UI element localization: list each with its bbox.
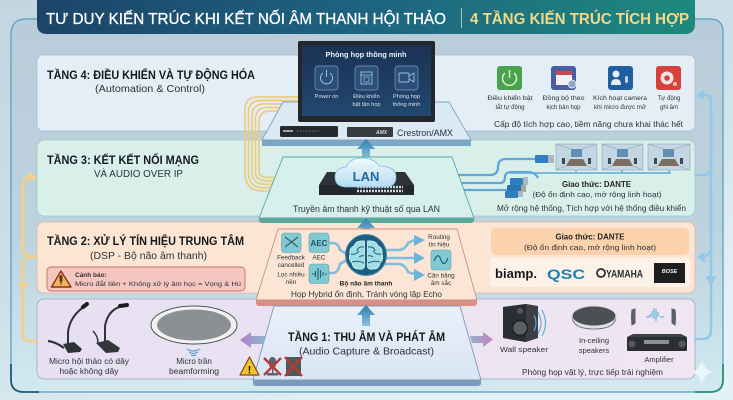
- icon: crossed speaker: [285, 357, 302, 376]
- room 1: [556, 144, 597, 170]
- tier 2 heading: (DSP - Bộ não âm thanh): [90, 250, 207, 262]
- icon: LAN cloud: LAN: [353, 169, 379, 184]
- control hardware: [280, 126, 453, 138]
- yellow control cables: [245, 97, 320, 191]
- icon: camera trigger: [608, 66, 633, 90]
- icon labels: khi micro được mở: [594, 104, 646, 111]
- panel: tier 3 background: [37, 140, 695, 216]
- Crestron/AMX label: Crestron/AMX: [397, 128, 453, 138]
- labels: Feedback: [277, 254, 306, 262]
- labels: tín hiệu: [429, 242, 450, 248]
- title divider: [461, 8, 462, 28]
- icon: warning triangle: !: [248, 364, 251, 376]
- microphone labels: Micro hội thảo có dây: [49, 357, 129, 366]
- icon: in-ceiling speaker: [572, 306, 616, 329]
- arrow: to speakers: [470, 332, 493, 347]
- icon: gooseneck microphone left: [48, 304, 87, 353]
- logo: Bose: BOSE: [662, 269, 678, 275]
- tier 3 trapezoid caption: Truyền âm thanh kỹ thuật số qua LAN: [293, 204, 440, 214]
- arrowheads: [414, 235, 425, 281]
- icon labels: ghi âm: [660, 105, 678, 111]
- tier 3 protocol text: [497, 180, 686, 213]
- warning icons: [240, 357, 302, 376]
- tier 4 heading: [47, 69, 255, 95]
- icon labels: tắt tự động: [495, 104, 525, 111]
- tier 2 protocol box: (Độ ổn định cao, mở rộng linh hoạt): [524, 243, 656, 252]
- network switch: [319, 172, 414, 195]
- display heading: Phòng họp thông minh: [326, 50, 407, 59]
- icon labels: Đồng bộ theo: [542, 96, 585, 102]
- icon: brain: [346, 234, 386, 276]
- labels: Lọc nhiều: [277, 270, 305, 278]
- brand logos: [490, 258, 690, 287]
- icon: amplifier: [627, 308, 687, 351]
- wall speaker label: Wall speaker: [500, 345, 549, 354]
- tier 2 brain signal flow: [277, 233, 455, 288]
- room 3: [648, 144, 690, 170]
- panel: tier 1 background: [37, 299, 695, 379]
- tier 2 protocol box: [491, 228, 689, 255]
- RJ45 connectors: [505, 155, 554, 198]
- labels: cancelled: [278, 262, 305, 269]
- icon: record: [656, 66, 681, 90]
- tier 2 heading: TẦNG 2: XỬ LÝ TÍN HIỆU TRUNG TÂM: [47, 235, 244, 248]
- tier 4 trapezoid: [262, 102, 471, 146]
- logo: Bose: [654, 263, 685, 283]
- tier 4 right caption: Cấp độ tích hợp cao, tiềm năng chưa khai thác hết: [494, 119, 684, 129]
- labels: [277, 234, 455, 288]
- tier 4 heading: TẦNG 4: ĐIỀU KHIỂN VÀ TỰ ĐỘNG HÓA: [47, 69, 255, 82]
- logo: QSC: QSC: [547, 266, 585, 282]
- microphone labels: beamforming: [169, 367, 219, 376]
- icon: power green: [497, 66, 522, 90]
- tier 3 protocol text: Mở rộng hệ thống, Tích hợp với hệ thống điều khiển: [497, 204, 686, 213]
- tier 3 heading: [47, 153, 199, 180]
- icon: wave equalizer: [431, 250, 451, 270]
- logo: biamp: biamp.: [495, 266, 537, 281]
- meeting room thumbnails: [510, 144, 690, 173]
- amplifier label: Amplifier: [644, 355, 674, 364]
- microphone labels: hoặc không dây: [60, 367, 118, 376]
- in-ceiling speaker label: In-ceiling: [579, 336, 609, 345]
- text: speakers: [579, 346, 609, 355]
- icon labels: kịch bản họp: [546, 105, 581, 111]
- icon: noise filter: [309, 264, 329, 284]
- icon: AEC: AEC: [311, 239, 328, 248]
- tier 1 trapezoid: [253, 306, 481, 386]
- display button: start meeting: bật tân họp: [352, 102, 380, 108]
- warning box: Cảnh báo:: [75, 272, 107, 279]
- signal lines: [329, 240, 414, 274]
- connector cluster: [505, 177, 528, 198]
- tier 3 heading: VÀ AUDIO OVER IP: [94, 167, 183, 180]
- labels: âm sắc: [431, 278, 451, 287]
- single connector: [535, 155, 554, 163]
- arrow: tier 3 to tier 4: [357, 139, 375, 158]
- microphone labels: [49, 357, 219, 376]
- title text: TƯ DUY KIẾN TRÚC KHI KẾT NỐI ÂM THANH HỘI THẢO: [46, 10, 446, 28]
- tier 1 right caption: Phòng họp vật lý, trực tiếp trải nghiệm: [522, 368, 663, 377]
- icon labels: Kích hoạt camera: [593, 96, 648, 102]
- microphone labels: Micro trần: [176, 357, 212, 366]
- tier 1 heading: TẦNG 1: THU ÂM VÀ PHÁT ÂM: [288, 331, 445, 344]
- display button: smart room: thông minh: [393, 102, 420, 108]
- warning box: Micro đắt tiền + Không xử lý âm học = Vọng & Hú: [75, 279, 241, 288]
- title highlight: 4 TẦNG KIẾN TRÚC TÍCH HỢP: [470, 10, 689, 28]
- icon: ceiling microphone: [151, 306, 237, 356]
- icon: wall speaker: [503, 304, 546, 342]
- panel: tier 4 background: [37, 55, 695, 131]
- arrow: tier 1 to tier 2: [357, 305, 375, 326]
- arrow: to capture devices: [240, 332, 265, 348]
- icon: feedback cancelled: [282, 233, 301, 252]
- tier 3 heading: TẦNG 3: KẾT KẾT NỐI MẠNG: [47, 153, 199, 167]
- microphones: [48, 304, 127, 353]
- title bar: [37, 0, 695, 34]
- sparkle: [690, 360, 714, 384]
- logo: Yamaha: YAMAHA: [606, 268, 643, 280]
- tier 3 trapezoid: [259, 157, 474, 223]
- tier 2 heading: [47, 235, 244, 262]
- display button: power on: Power on: [315, 94, 338, 100]
- display button: start meeting: Điều khiển: [353, 93, 380, 100]
- display button: start meeting: [352, 66, 380, 108]
- room 2: [602, 144, 643, 170]
- smart display: [298, 41, 435, 122]
- connector stems: [510, 170, 671, 173]
- tier 1 heading: [288, 331, 445, 358]
- right blue pipes: [694, 90, 717, 339]
- icon: calendar sync: [551, 66, 576, 90]
- tier 4 heading: (Automation & Control): [95, 83, 205, 95]
- icon: AEC: [309, 233, 329, 252]
- labels: AEC: [313, 254, 326, 262]
- display button: smart room: Phòng họp: [393, 94, 420, 100]
- tier 3 protocol text: Giao thức: DANTE: [562, 180, 631, 189]
- icon: gooseneck microphone right: [93, 305, 127, 353]
- labels: nền: [286, 277, 297, 286]
- tier 3 protocol text: (Độ ổn định cao, mở rộng linh hoạt): [532, 190, 662, 199]
- icon: LAN cloud: [335, 158, 396, 187]
- left yellow pipes: [18, 171, 37, 341]
- logo: Yamaha: [597, 268, 643, 280]
- labels: Bộ não âm thanh: [340, 280, 392, 288]
- tier 2 trapezoid: [256, 229, 477, 306]
- labels: Cân bằng: [427, 270, 455, 280]
- icon: warning mic: [52, 271, 71, 287]
- icon labels: Tự động: [658, 96, 680, 102]
- icon labels: [488, 95, 680, 111]
- labels: Routing: [428, 234, 450, 241]
- tier 1 heading: (Audio Capture & Broadcast): [299, 346, 434, 358]
- tier 4 automation icons: [488, 66, 681, 111]
- AMX unit: [347, 127, 393, 137]
- warning box: [47, 267, 245, 291]
- icon: crossed microphone: [264, 357, 281, 376]
- arrow: tier 2 to tier 3: [357, 218, 375, 236]
- icon labels: Điều khiển bật: [488, 95, 533, 102]
- blue network cables: [410, 159, 538, 190]
- tier 2 protocol box: Giao thức: DANTE: [556, 232, 624, 242]
- AMX unit: AMX: [375, 130, 388, 136]
- Crestron unit: [280, 126, 338, 137]
- display button: smart room: [393, 66, 420, 108]
- panel: tier 2 background: [37, 222, 695, 293]
- tier 2 trapezoid caption: Họp Hybrid ổn định, Tránh vòng lặp Echo: [291, 289, 442, 299]
